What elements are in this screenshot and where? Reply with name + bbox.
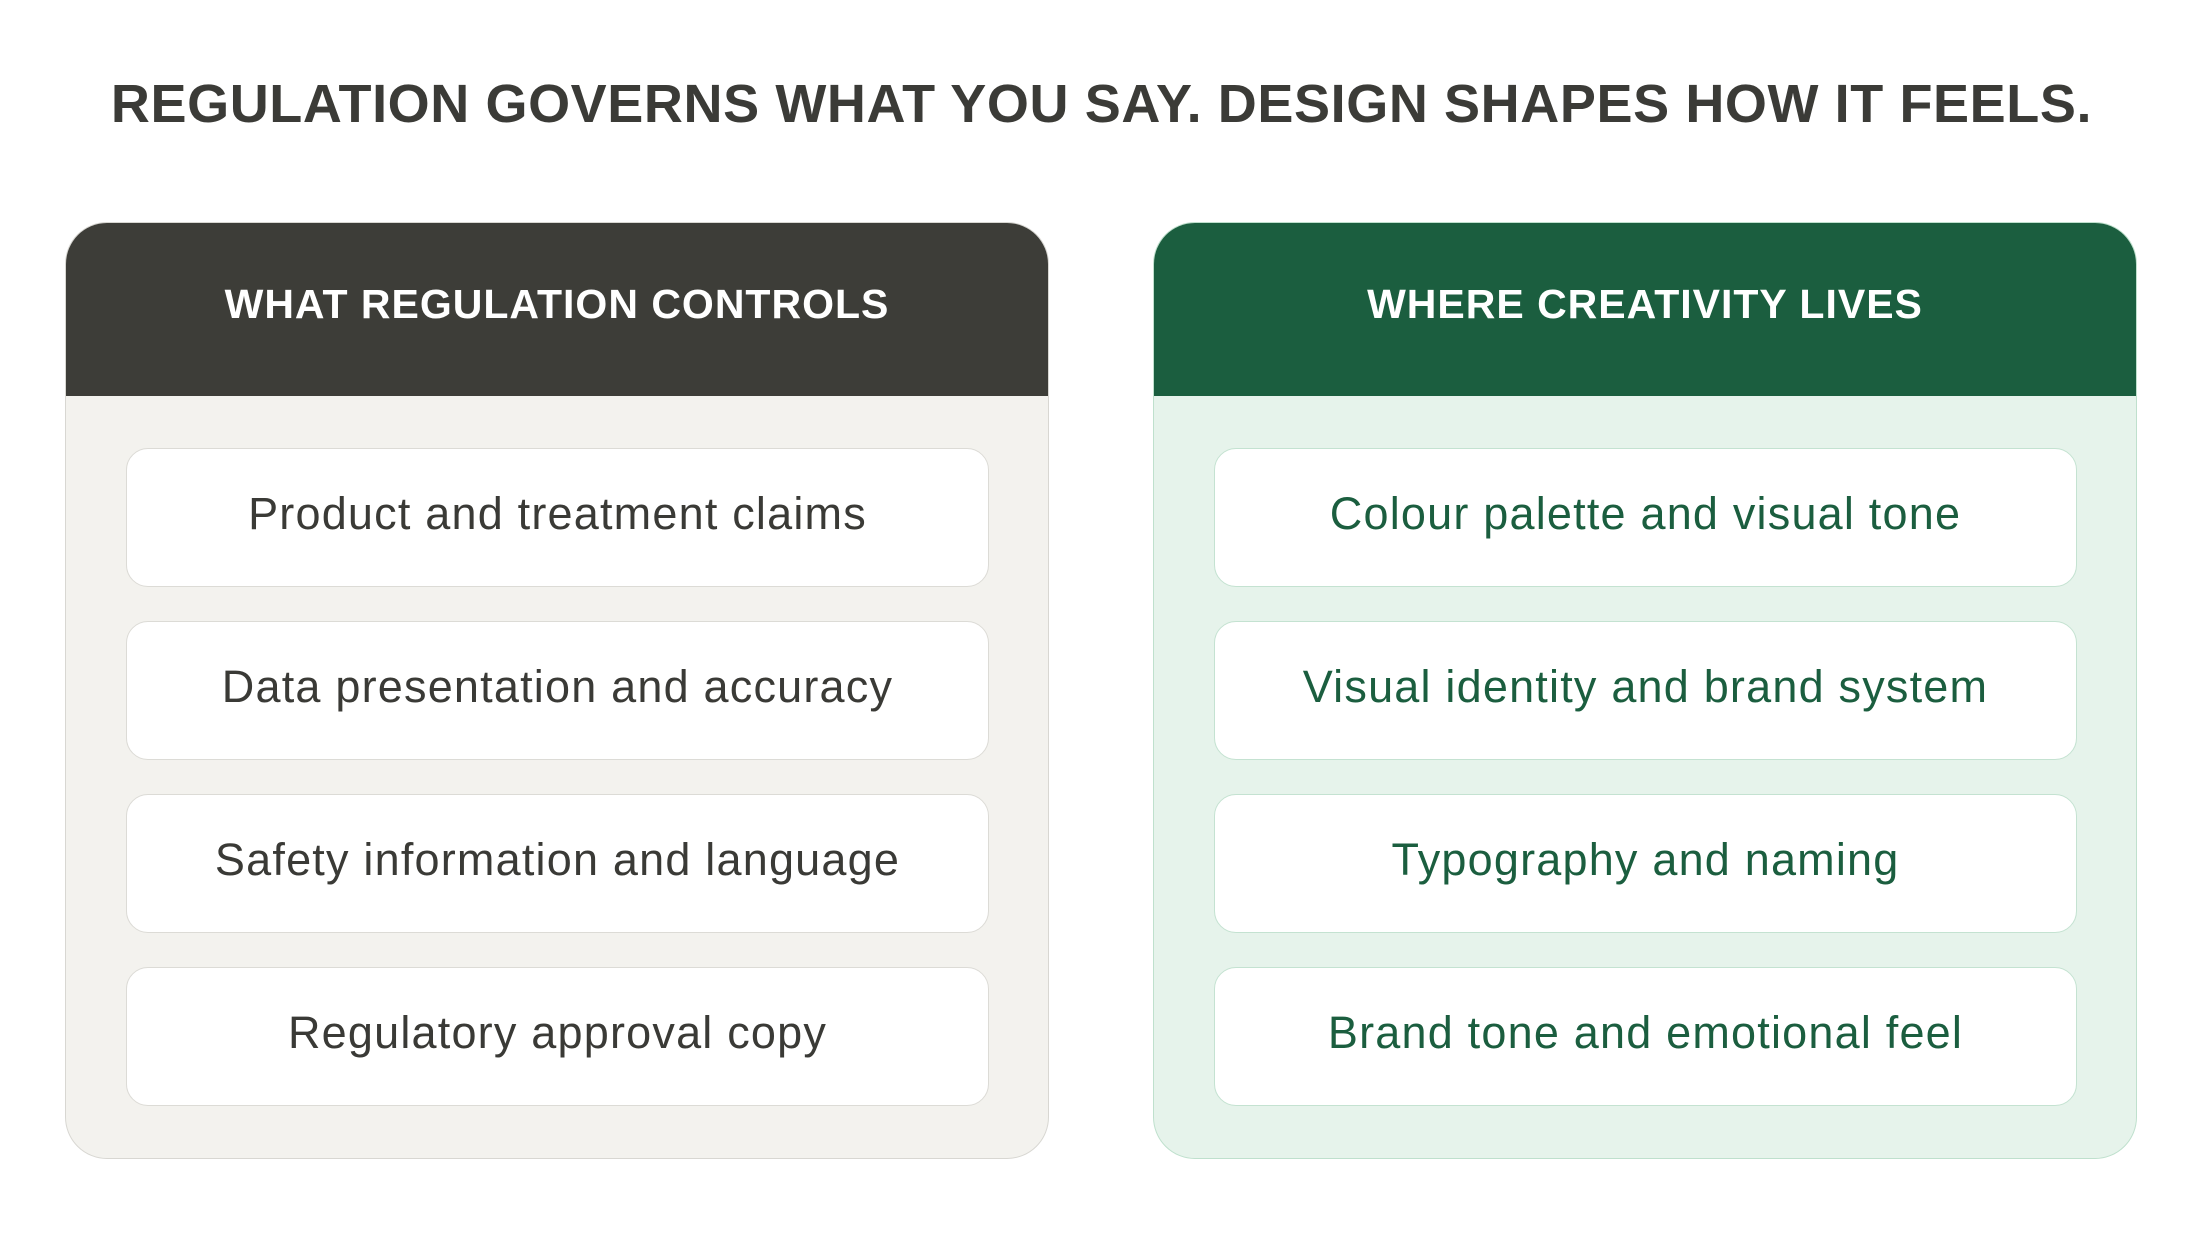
item: colour palette xyxy=(1214,448,2077,587)
item: visual identity xyxy=(1214,621,2077,760)
heading: what regulation controls: WHAT REGULATION CONTROLS xyxy=(225,281,889,327)
item: typography xyxy=(1214,794,2077,933)
item: data presentation xyxy=(126,621,989,760)
heading: where creativity lives: WHERE CREATIVITY LIVES xyxy=(1367,281,1923,327)
item: regulatory approval: Regulatory approval copy xyxy=(288,1006,827,1058)
item: data presentation: Data presentation and accuracy xyxy=(222,660,893,712)
title: REGULATION GOVERNS WHAT YOU SAY. DESIGN SHAPES HOW IT FEELS. xyxy=(111,74,2092,134)
item: regulatory approval xyxy=(126,967,989,1106)
heading: what regulation controls xyxy=(66,223,1048,396)
item: product claims xyxy=(126,448,989,587)
item: brand tone: Brand tone and emotional feel xyxy=(1328,1006,1963,1058)
panel: where creativity lives xyxy=(1153,222,2137,1159)
item: safety information xyxy=(126,794,989,933)
item: product claims: Product and treatment claims xyxy=(248,488,867,538)
item: brand tone xyxy=(1214,967,2077,1106)
panel: what regulation controls xyxy=(65,222,1049,1159)
heading: where creativity lives xyxy=(1154,223,2136,396)
item: visual identity: Visual identity and brand system xyxy=(1303,660,1988,712)
item: typography: Typography and naming xyxy=(1391,834,1900,884)
item: safety information: Safety information and language xyxy=(215,834,900,884)
item: colour palette: Colour palette and visual tone xyxy=(1330,488,1961,538)
